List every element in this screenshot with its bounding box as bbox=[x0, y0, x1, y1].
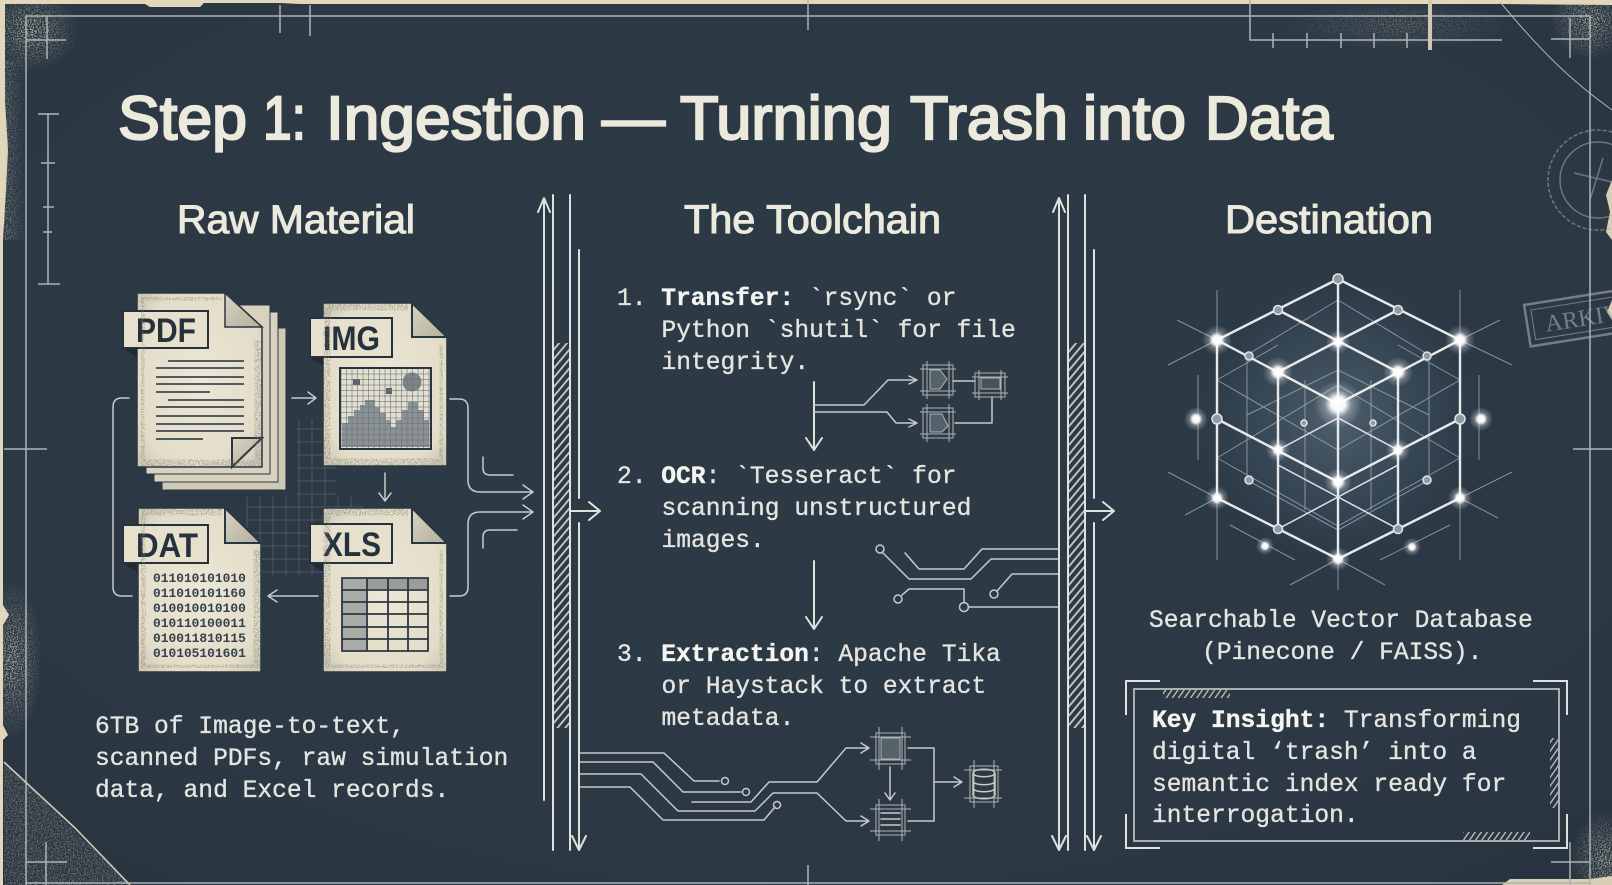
file: DAT: 010105101601 bbox=[153, 646, 246, 661]
step 3: extraction: metadata. bbox=[662, 706, 794, 733]
callout: key insight: interrogation. bbox=[1152, 803, 1359, 830]
step 2: OCR: scanning unstructured bbox=[662, 496, 971, 523]
file: PDF stack bbox=[123, 293, 286, 490]
step 1: transfer: Transfer: `rsync` or bbox=[661, 286, 956, 313]
file: DAT: 010011810115 bbox=[153, 631, 246, 646]
step 1: transfer: Python `shutil` for file bbox=[662, 318, 1016, 345]
callout: key insight: digital ‘trash’ into a bbox=[1152, 740, 1477, 767]
callout: key insight bbox=[1126, 681, 1567, 848]
file: IMG: IMG bbox=[323, 320, 380, 358]
diagram: OCR circuit traces bbox=[876, 545, 1058, 612]
file: XLS bbox=[310, 508, 447, 672]
step 3: extraction: 3. bbox=[617, 642, 661, 669]
panel: toolchain steps bbox=[580, 286, 1058, 841]
arrow: step 2 to step 3 bbox=[806, 561, 822, 629]
step 1: transfer: 1. bbox=[617, 286, 661, 313]
background grid bbox=[246, 419, 363, 575]
heading: raw material: Raw Material bbox=[177, 198, 415, 242]
file: DAT: 011010101160 bbox=[153, 586, 246, 601]
text: raw material description: 6TB of Image-to-text, bbox=[95, 714, 405, 741]
title: Turning bbox=[680, 84, 892, 152]
cube glowing points bbox=[1184, 325, 1493, 571]
file: DAT: 011010101010 bbox=[153, 571, 246, 586]
heading: the toolchain: The Toolchain bbox=[684, 198, 941, 242]
arrow: step 1 to step 2 bbox=[806, 382, 822, 450]
archive rectangular stamp bbox=[1524, 288, 1612, 346]
title: Data bbox=[1205, 84, 1333, 152]
divider arrow: left bbox=[538, 195, 600, 850]
title: Step bbox=[118, 84, 247, 152]
cube nodes bbox=[1212, 274, 1465, 534]
cube bright edges bbox=[1217, 279, 1460, 559]
callout: key insight: semantic index ready for bbox=[1152, 772, 1506, 799]
text: raw material description: scanned PDFs, raw simulation bbox=[95, 746, 508, 773]
flow arrows between files bbox=[113, 392, 533, 602]
title: Ingestion bbox=[326, 84, 586, 152]
title: into bbox=[1083, 84, 1186, 152]
text: destination description: Searchable Vector Database bbox=[1149, 608, 1533, 635]
file: DAT bbox=[123, 508, 261, 672]
step 2: OCR: 2. bbox=[617, 464, 661, 491]
text: destination description: (Pinecone / FAISS). bbox=[1202, 640, 1482, 667]
icon: vector database cube bbox=[1168, 268, 1512, 590]
step 1: transfer: integrity. bbox=[662, 350, 809, 377]
file: DAT: 010110100011 bbox=[153, 616, 246, 631]
callout: key insight: Transforming bbox=[1329, 708, 1521, 735]
divider arrow: right bbox=[1052, 195, 1114, 850]
file: IMG bbox=[310, 303, 447, 466]
diagram: transfer branches bbox=[814, 361, 1008, 442]
file: PDF stack: PDF bbox=[136, 312, 196, 350]
step 2: OCR: images. bbox=[662, 528, 765, 555]
file: XLS: XLS bbox=[323, 526, 381, 564]
step 2: OCR: OCR: `Tesseract` for bbox=[661, 464, 956, 491]
panel: raw material file icons bbox=[113, 293, 533, 672]
cube faint construction lines bbox=[1168, 290, 1512, 590]
text: raw material description: data, and Excel records. bbox=[95, 778, 449, 805]
file: DAT: DAT bbox=[136, 527, 198, 565]
title: 1: bbox=[263, 84, 306, 152]
title: Trash bbox=[910, 84, 1068, 152]
paper grime bbox=[141, 297, 443, 668]
step 3: extraction: or Haystack to extract bbox=[662, 674, 986, 701]
diagram: extraction pipeline bbox=[580, 727, 1002, 841]
step 3: extraction: Extraction: Apache Tika bbox=[661, 642, 1001, 669]
callout: key insight: Key Insight: bbox=[1152, 708, 1329, 735]
title: — bbox=[602, 84, 665, 152]
heading: destination: Destination bbox=[1225, 198, 1433, 242]
file: DAT: 010010010100 bbox=[153, 601, 246, 616]
archive round stamp bbox=[1548, 130, 1612, 230]
title bbox=[118, 84, 1333, 152]
right edge tear bbox=[1502, 180, 1612, 885]
